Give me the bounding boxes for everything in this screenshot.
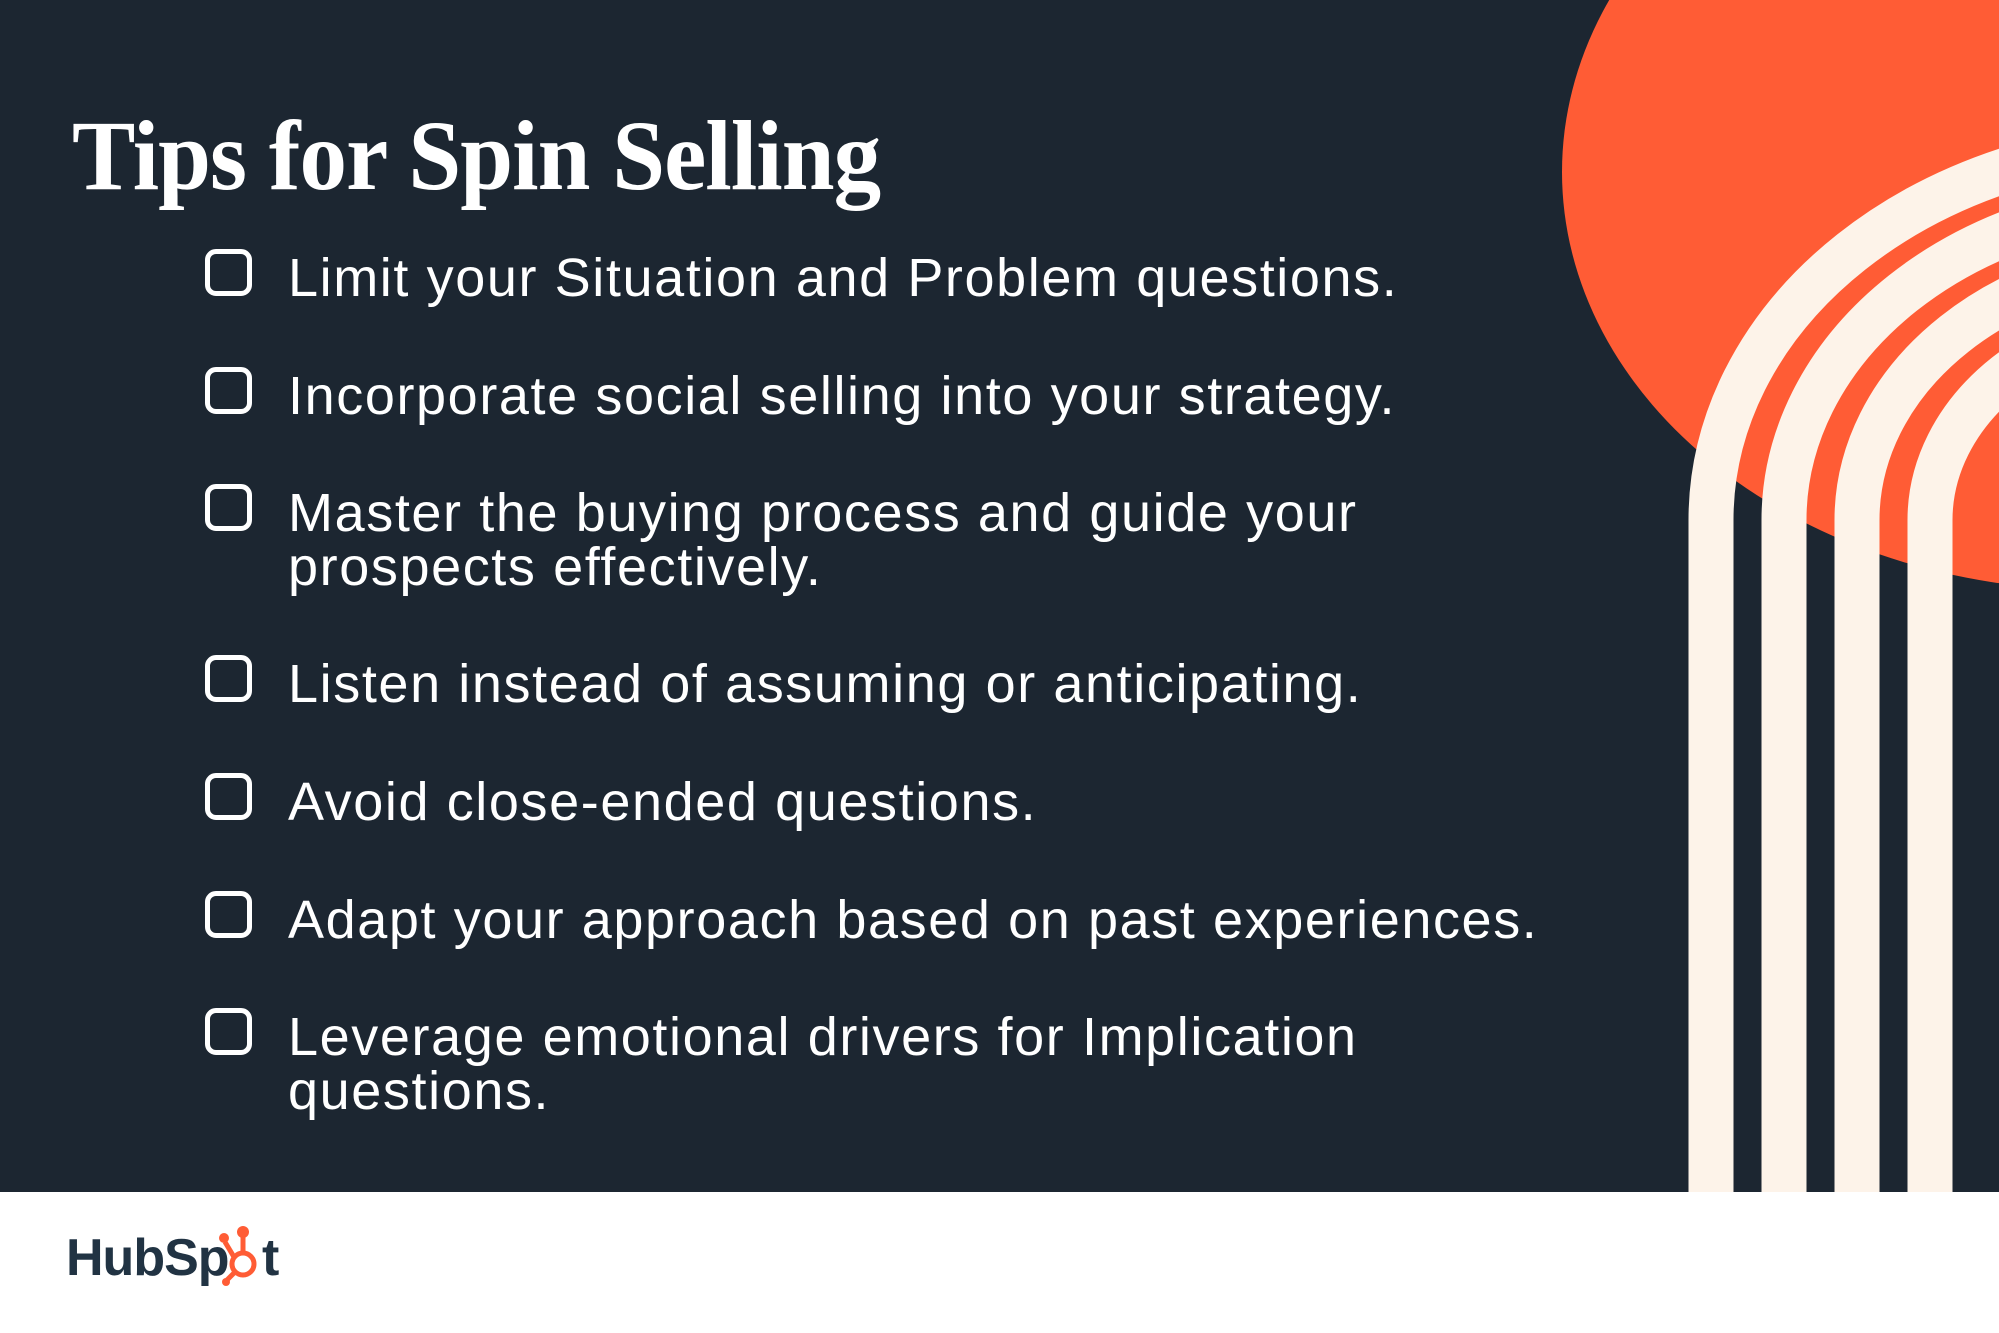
logo: HubSpot: HubSp: [66, 1229, 229, 1287]
list item 7: Leverage emotional drivers for Implication: [288, 1007, 1358, 1067]
list item 3: [205, 483, 1358, 597]
list item 7: questions.: [288, 1061, 550, 1121]
list item 7: [205, 1007, 1358, 1121]
list item 3: Master the buying process and guide your: [288, 483, 1358, 543]
list item 2: Incorporate social selling into your strategy.: [288, 366, 1396, 426]
list item 5: Avoid close-ended questions.: [288, 772, 1037, 832]
list item 3: prospects effectively.: [288, 537, 822, 597]
logo: HubSpot: t: [262, 1229, 278, 1287]
list item 6: Adapt your approach based on past experiences.: [288, 890, 1538, 950]
title: Tips for Spin Selling: [72, 100, 880, 211]
list item 1: Limit your Situation and Problem questions.: [288, 248, 1398, 308]
list item 4: Listen instead of assuming or anticipating.: [288, 654, 1362, 714]
